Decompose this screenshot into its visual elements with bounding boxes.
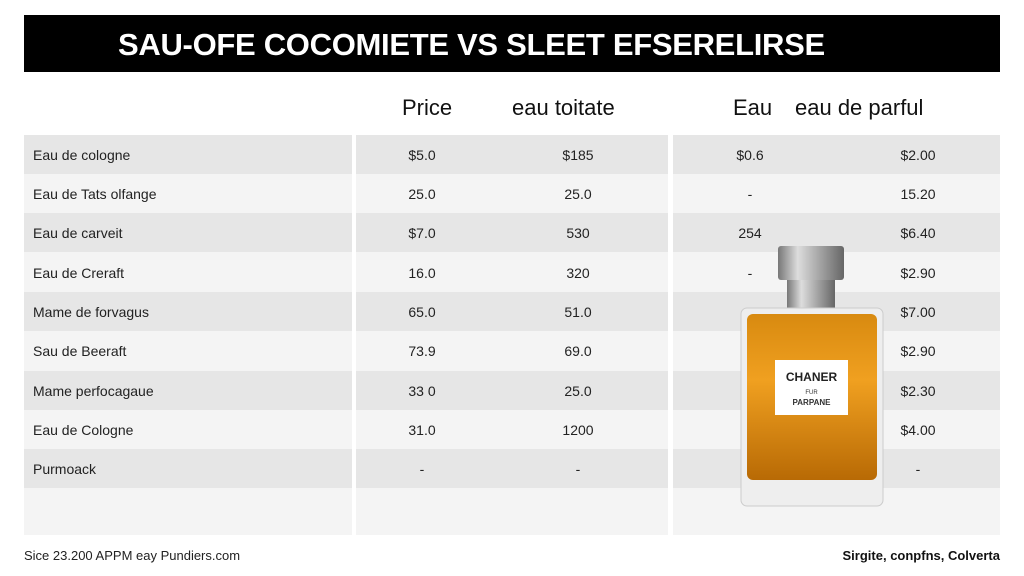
column headers: Eau (733, 95, 772, 120)
perfume bottle: FUR (805, 390, 818, 396)
row 6 (33, 343, 936, 359)
row 2: - (748, 186, 752, 202)
row 5: $7.00 (900, 304, 936, 320)
row 3: 254 (738, 225, 762, 241)
row 8: $4.00 (900, 422, 936, 438)
row 6: 73.9 (408, 343, 436, 359)
row 4: - (748, 265, 752, 281)
table (24, 135, 1000, 535)
row 8: Eau de Cologne (33, 422, 133, 438)
row 4: $2.90 (900, 265, 936, 281)
row 2 (33, 186, 936, 202)
row 2: 25.0 (564, 186, 592, 202)
row 4 (33, 265, 936, 281)
row 5: 65.0 (408, 304, 436, 320)
row 4: 16.0 (408, 265, 436, 281)
row 7 (24, 371, 1000, 410)
row 4: Eau de Creraft (33, 265, 124, 281)
row 9: - (916, 461, 920, 477)
row 8: 31.0 (408, 422, 436, 438)
perfume bottle: PARPANE (793, 398, 831, 407)
row 9: Purmoack (33, 461, 96, 477)
row 9: - (576, 461, 580, 477)
row 9 (24, 449, 1000, 488)
row 7: Mame perfocagaue (33, 383, 154, 399)
row 3: 530 (566, 225, 590, 241)
row 7: 25.0 (564, 383, 592, 399)
column headers: eau toitate (512, 95, 615, 120)
footer left: Sice 23.200 APPM eay Pundiers.com (24, 548, 240, 563)
row 3: $7.0 (408, 225, 436, 241)
row 5 (24, 292, 1000, 331)
row 5: Mame de forvagus (33, 304, 149, 320)
row 1: Eau de cologne (33, 147, 130, 163)
row 3 (24, 213, 1000, 252)
row 8 (33, 422, 936, 438)
perfume bottle: CHANER (786, 370, 837, 384)
title banner (24, 15, 1000, 72)
row 7: $2.30 (900, 383, 936, 399)
row 1: $5.0 (408, 147, 436, 163)
row 6: $2.90 (900, 343, 936, 359)
row 5: 51.0 (564, 304, 592, 320)
footer right: Sirgite, conpfns, Colverta (843, 548, 1000, 563)
column headers: Price (402, 95, 452, 120)
row 2: Eau de Tats olfange (33, 186, 157, 202)
row 1: $0.6 (736, 147, 764, 163)
perfume bottle (740, 246, 884, 506)
title: SAU-OFE COCOMIETE VS SLEET EFSERELIRSE (118, 27, 825, 62)
row 6: Sau de Beeraft (33, 343, 126, 359)
row 7: 33 0 (408, 383, 436, 399)
row 1 (24, 135, 1000, 174)
row 4: 320 (566, 265, 590, 281)
column headers: eau de parful (795, 95, 923, 120)
column headers (402, 95, 923, 120)
row 2: 25.0 (408, 186, 436, 202)
row 6: 69.0 (564, 343, 592, 359)
row 9: - (420, 461, 424, 477)
row 2: 15.20 (900, 186, 936, 202)
row 8: 1200 (562, 422, 594, 438)
row 1: $2.00 (900, 147, 936, 163)
row 3: $6.40 (900, 225, 936, 241)
row 3: Eau de carveit (33, 225, 122, 241)
row 1: $185 (562, 147, 594, 163)
